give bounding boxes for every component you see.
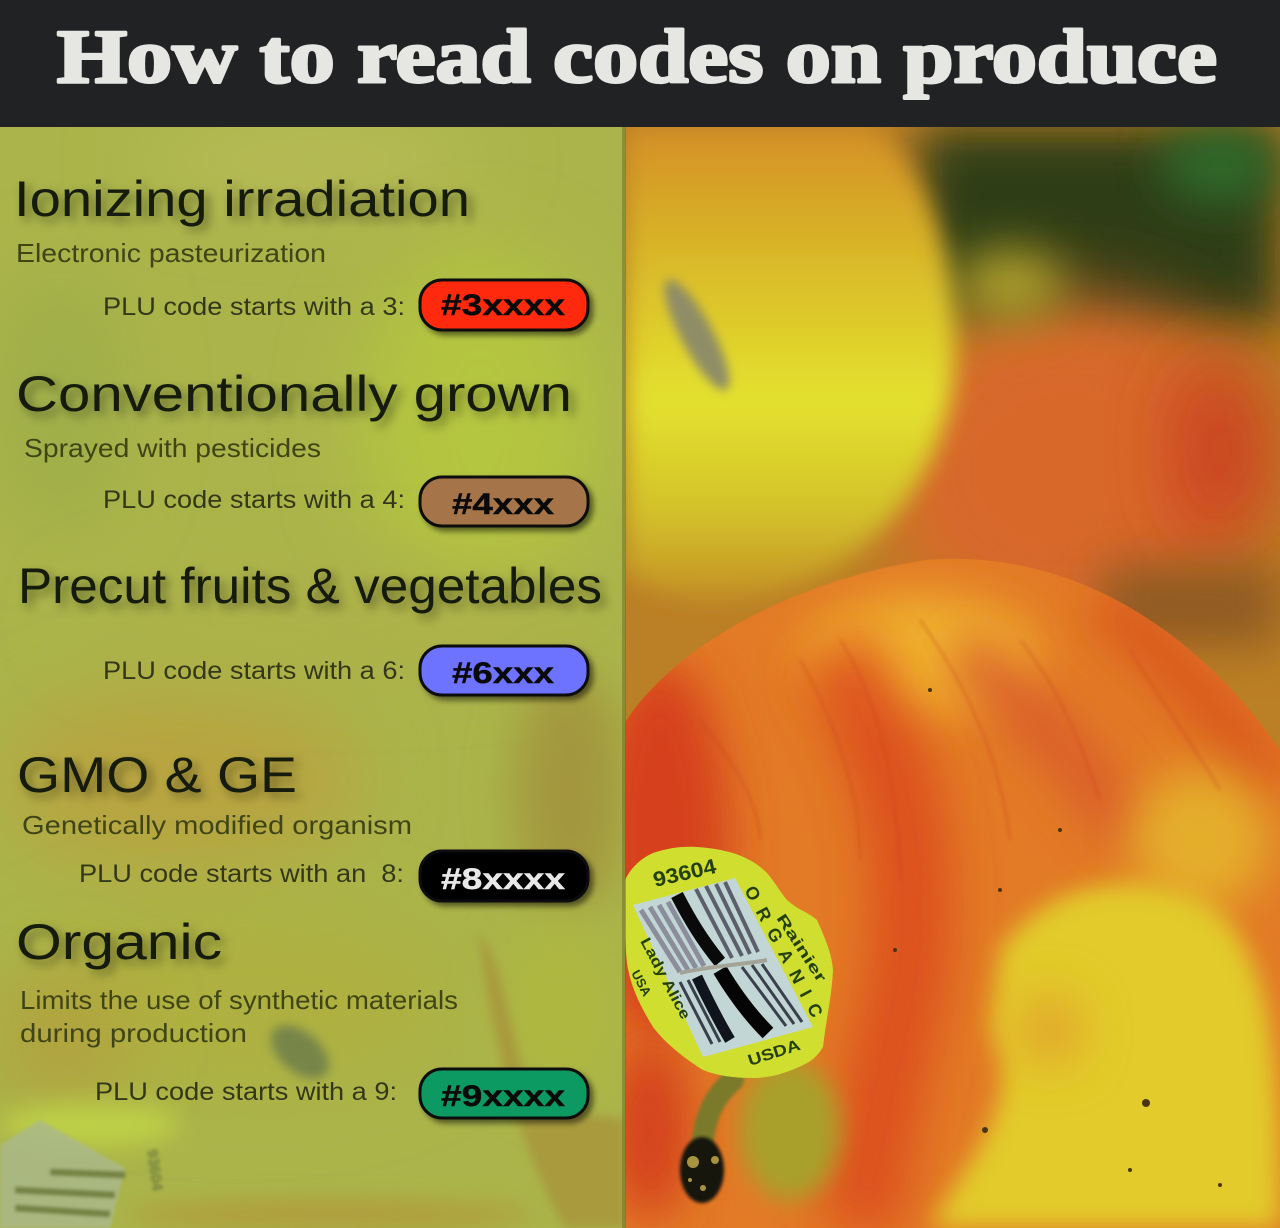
badge: #4xxx: #4xxx bbox=[452, 488, 554, 521]
icon: organic produce sticker: USDA bbox=[746, 1037, 803, 1070]
badge: #8xxxx: #8xxxx bbox=[441, 863, 565, 896]
icon: organic produce sticker: ORGANIC bbox=[740, 882, 827, 1021]
badge: #9xxxx bbox=[420, 1069, 588, 1118]
badge: #6xxx bbox=[420, 646, 588, 695]
main apple bbox=[590, 550, 1280, 1228]
section: conventionally grown: Sprayed with pesticides bbox=[24, 433, 321, 463]
section: organic bbox=[16, 914, 588, 1118]
section: conventionally grown: PLU code starts with a 4: bbox=[103, 486, 405, 514]
section: GMO and GE bbox=[17, 747, 588, 901]
icon: organic produce sticker: USA bbox=[628, 967, 655, 999]
badge: #3xxxx: #3xxxx bbox=[441, 289, 565, 322]
icon: apple stem bbox=[680, 1080, 733, 1203]
section: ionizing irradiation bbox=[14, 171, 588, 330]
panel edge line bbox=[622, 127, 626, 1228]
icon: organic produce sticker bbox=[624, 847, 833, 1078]
section: organic: PLU code starts with a 9: bbox=[95, 1078, 397, 1106]
section: organic: during production bbox=[20, 1018, 247, 1048]
panel: translucent info panel bbox=[0, 127, 625, 1228]
section: organic: Limits the use of synthetic materials bbox=[20, 985, 458, 1015]
section: ionizing irradiation: Electronic pasteurization bbox=[16, 238, 326, 268]
title bar bbox=[0, 0, 1280, 127]
section: conventionally grown bbox=[16, 366, 588, 526]
section: precut fruits and vegetables bbox=[18, 558, 602, 695]
section: GMO and GE: PLU code starts with an 8: bbox=[79, 860, 404, 888]
section: conventionally grown: Conventionally grown bbox=[16, 366, 572, 422]
section: precut fruits and vegetables: Precut fruits & vegetables bbox=[18, 558, 602, 614]
icon: organic produce sticker: Lady Alice bbox=[636, 935, 694, 1022]
badge: #8xxxx bbox=[420, 851, 588, 901]
section: ionizing irradiation: PLU code starts with a 3: bbox=[103, 293, 405, 321]
sticker text: 93604 bbox=[651, 855, 719, 892]
badge: #9xxxx: #9xxxx bbox=[441, 1080, 565, 1113]
section: ionizing irradiation: Ionizing irradiation bbox=[14, 171, 470, 227]
section: GMO and GE: GMO & GE bbox=[17, 747, 297, 803]
icon: faded sticker reflection bbox=[0, 1120, 166, 1228]
icon: organic produce sticker: Rainier bbox=[773, 911, 830, 986]
section: precut fruits and vegetables: PLU code starts with a 6: bbox=[103, 657, 405, 685]
badge: #3xxxx bbox=[420, 280, 588, 330]
section: GMO and GE: Genetically modified organism bbox=[22, 810, 412, 840]
title bar: How to read codes on produce bbox=[57, 15, 1217, 99]
badge: #4xxx bbox=[420, 477, 588, 526]
badge: #6xxx: #6xxx bbox=[452, 657, 554, 690]
photo: apples background bbox=[590, 127, 1280, 1228]
section: organic: Organic bbox=[16, 914, 222, 970]
icon: faded sticker reflection: 93604 bbox=[143, 1148, 166, 1193]
